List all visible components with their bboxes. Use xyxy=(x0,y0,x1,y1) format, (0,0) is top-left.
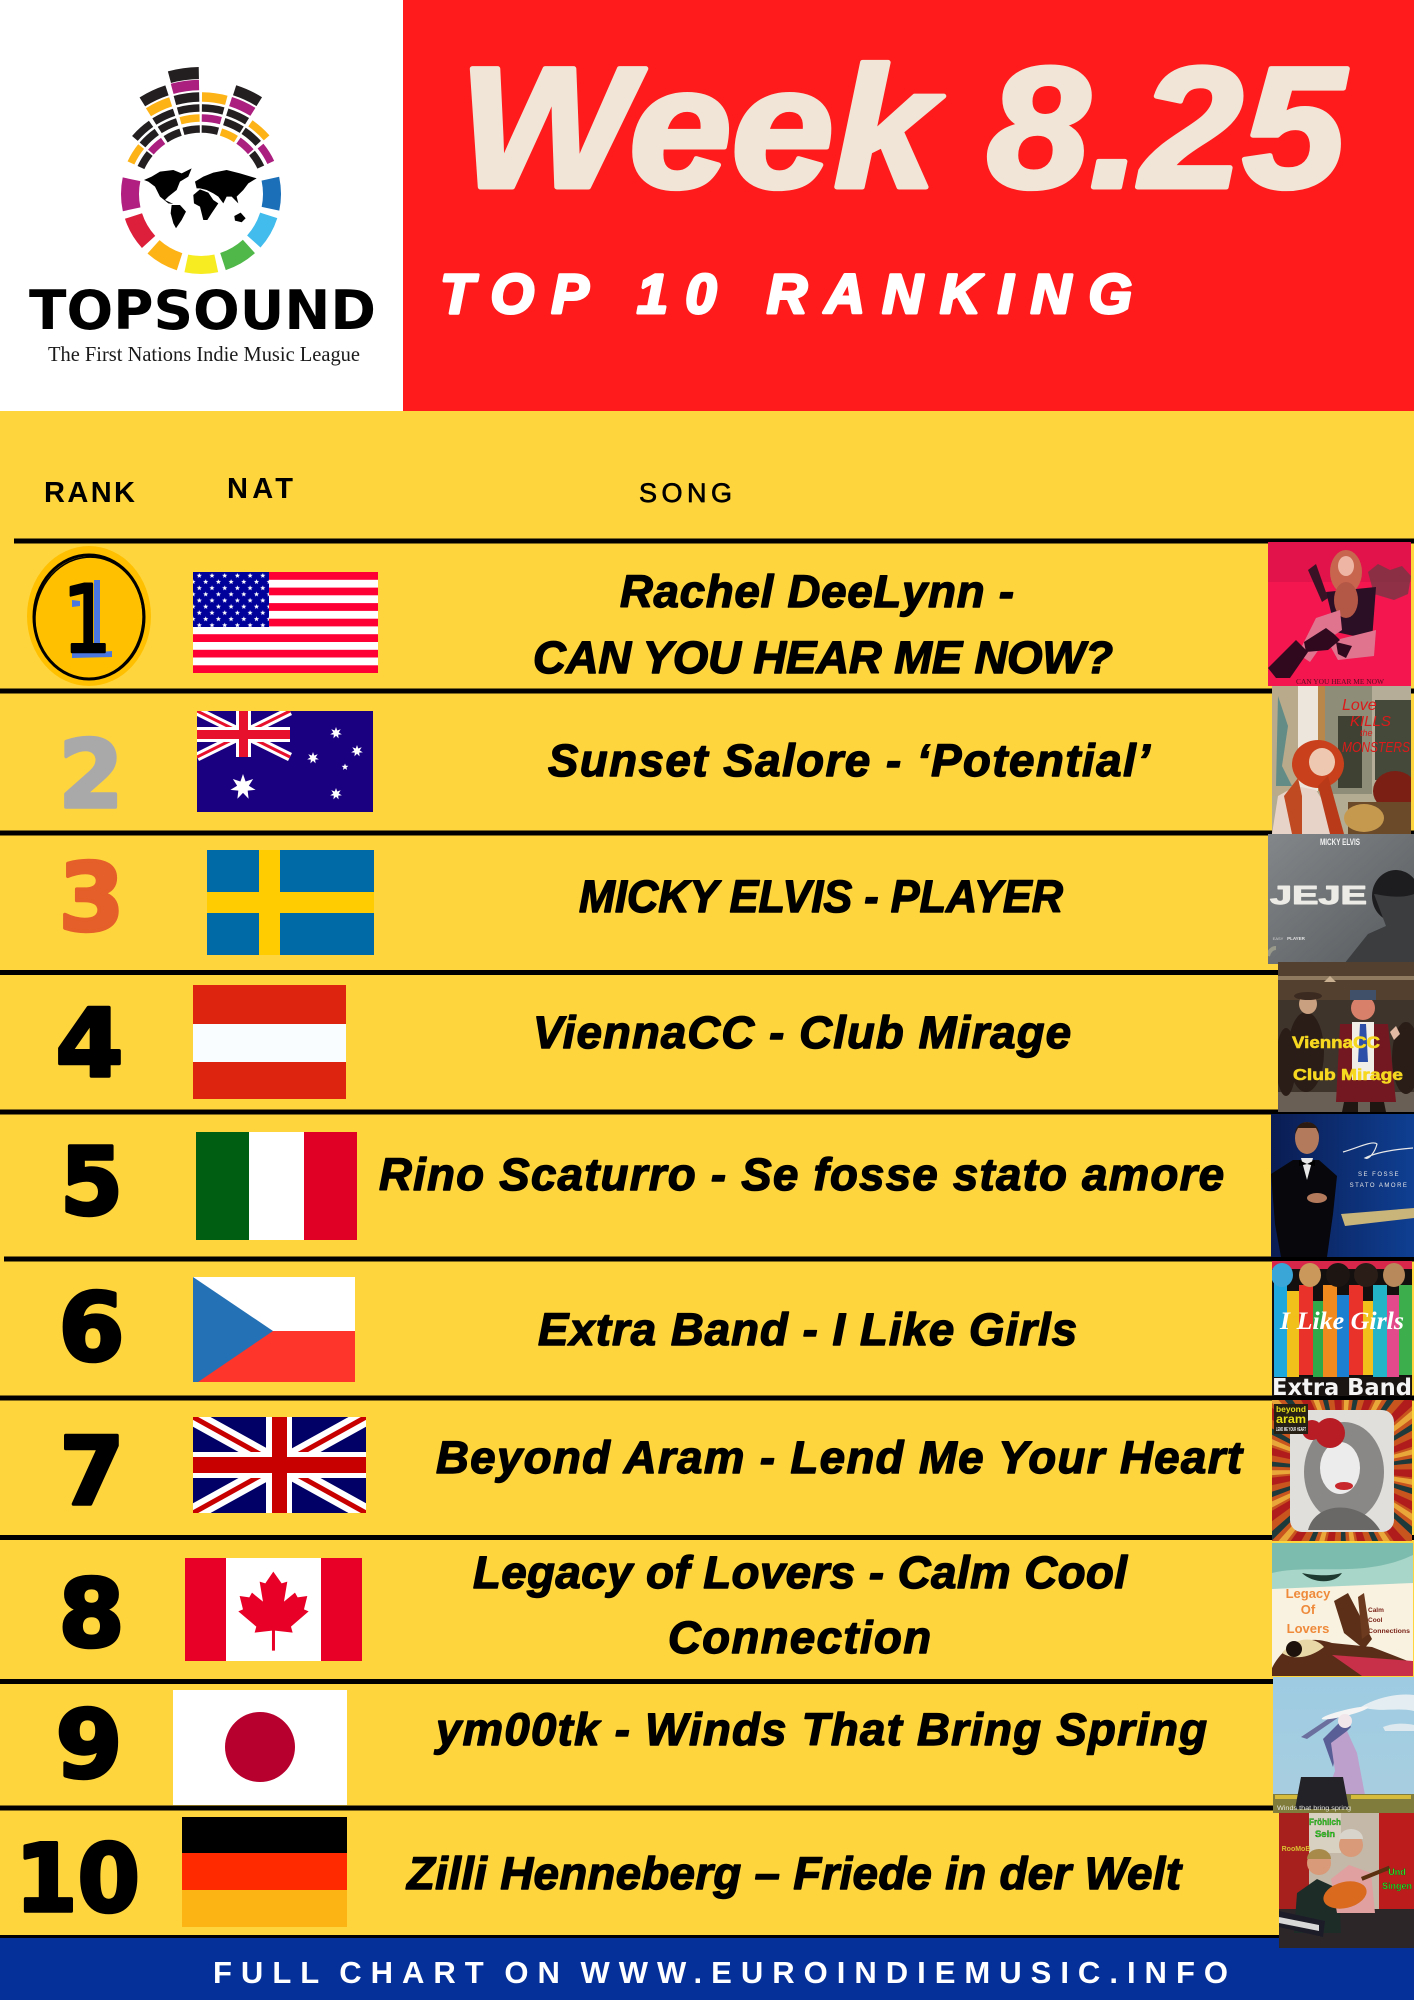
column: rank: RANK xyxy=(44,477,135,509)
logo tagline: The First Nations Indie Music League xyxy=(48,342,360,366)
rank 6: 6 xyxy=(58,1274,124,1383)
row 2 xyxy=(58,686,1414,834)
song title: Legacy of Lovers - Calm Cool xyxy=(473,1547,1128,1598)
cover art 6: Extra Band xyxy=(1272,1375,1412,1401)
row 10 xyxy=(15,1817,1183,1934)
song title: ViennaCC - Club Mirage xyxy=(533,1007,1071,1058)
cover art 5: STATO AMORE xyxy=(1350,1183,1408,1189)
cover art 3: JEJE xyxy=(1270,880,1367,910)
rank 5: 5 xyxy=(60,1128,123,1237)
cover art 6: I Like Girls xyxy=(1279,1308,1404,1335)
cover art 8: Of xyxy=(1301,1602,1316,1617)
song title: MICKY ELVIS - PLAYER xyxy=(579,871,1063,922)
song title: CAN YOU HEAR ME NOW? xyxy=(533,632,1113,683)
subtitle: TOP 10 RANKING xyxy=(440,262,1132,325)
equalizer arcs xyxy=(49,43,353,347)
cover art 8: Legacy xyxy=(1286,1586,1331,1601)
cover art 8: Calm xyxy=(1368,1607,1384,1614)
rank 2: 2 xyxy=(58,721,124,830)
row 5 xyxy=(60,1114,1414,1257)
cover art 8: Connections xyxy=(1368,1628,1410,1635)
logo wordmark: TOPSOUND xyxy=(29,279,376,342)
cover art 10: RooMoB xyxy=(1282,1846,1310,1853)
song title xyxy=(533,566,1113,683)
cover art 10: Sein xyxy=(1315,1829,1335,1840)
row 6 xyxy=(58,1261,1412,1401)
cover art 8: Lovers xyxy=(1287,1621,1329,1636)
cover art 5 xyxy=(1271,1114,1414,1257)
rank 3: 3 xyxy=(58,844,124,953)
logo emblem xyxy=(49,43,353,347)
song title: Connection xyxy=(668,1612,931,1663)
cover art 2 xyxy=(1272,686,1411,834)
song title: ym00tk - Winds That Bring Spring xyxy=(434,1704,1207,1755)
flag: Austria xyxy=(193,985,346,1099)
rank 10: 10 xyxy=(15,1825,140,1934)
cover art 1 xyxy=(1268,542,1411,686)
cover art 4: ViennaCC xyxy=(1292,1033,1380,1052)
flag: Italy xyxy=(196,1132,357,1240)
cover art 3: EASY xyxy=(1273,936,1284,941)
flag: Czech Republic xyxy=(193,1277,355,1382)
cover art 7: beyond xyxy=(1276,1405,1306,1414)
song title xyxy=(473,1547,1128,1663)
song title: Extra Band - I Like Girls xyxy=(538,1304,1077,1355)
rank 4: 4 xyxy=(56,990,124,1099)
cover art 4 xyxy=(1278,962,1414,1112)
flag: Australia xyxy=(197,711,373,812)
flag: Germany xyxy=(182,1817,347,1927)
cover art 10 xyxy=(1279,1813,1414,1948)
cover art 10: Fröhlich xyxy=(1309,1817,1341,1828)
cover art 9 xyxy=(1273,1677,1414,1813)
cover art 2: Love xyxy=(1342,697,1377,714)
cover art 2: KILLS xyxy=(1350,713,1391,730)
cover art 5: SE FOSSE xyxy=(1358,1172,1400,1178)
panel: logo xyxy=(0,0,403,411)
row dividers xyxy=(0,538,1414,1938)
cover art 7: aram xyxy=(1276,1412,1306,1426)
cover art 4: Club Mirage xyxy=(1293,1067,1403,1084)
cover art 3 xyxy=(1268,834,1414,964)
cover art 1: CAN YOU HEAR ME NOW xyxy=(1296,677,1385,686)
cover art 10: Singen xyxy=(1382,1881,1412,1891)
rank 8: 8 xyxy=(58,1560,124,1669)
title: Week 8.25 xyxy=(459,32,1347,224)
rank 1 badge xyxy=(27,546,151,686)
cover art 8 xyxy=(1272,1543,1413,1676)
panel: title banner xyxy=(403,0,1414,411)
cover art 3: PLAYER xyxy=(1287,936,1306,941)
footer band xyxy=(0,1938,1414,2000)
song title: Rachel DeeLynn - xyxy=(620,566,1014,617)
rank 1 badge: 1 xyxy=(62,566,112,675)
cover art 2: the xyxy=(1360,728,1373,738)
row 7 xyxy=(60,1348,1414,1592)
song title: Beyond Aram - Lend Me Your Heart xyxy=(436,1432,1244,1483)
row 3 xyxy=(58,834,1414,964)
cover art 8: Cool xyxy=(1368,1617,1383,1624)
flag: Canada xyxy=(185,1558,362,1661)
table header xyxy=(44,473,732,509)
flag: United Kingdom xyxy=(193,1417,366,1513)
flag: Japan xyxy=(173,1690,347,1805)
cover art 10: Und xyxy=(1388,1867,1406,1877)
column: nat: NAT xyxy=(227,473,293,505)
row 1 xyxy=(27,542,1411,686)
cover art 6 xyxy=(1272,1261,1412,1401)
column: song: SONG xyxy=(639,478,732,508)
rank 9: 9 xyxy=(56,1691,122,1800)
row 4 xyxy=(56,962,1414,1112)
row 8 xyxy=(58,1543,1413,1676)
cover art 7 xyxy=(1272,1400,1412,1541)
cover art 9: Winds that bring spring xyxy=(1277,1805,1351,1812)
rank 7: 7 xyxy=(60,1418,124,1527)
colour ring xyxy=(101,94,301,294)
song title: Sunset Salore - ‘Potential’ xyxy=(548,735,1151,786)
row 9 xyxy=(56,1677,1414,1813)
flag: Sweden xyxy=(207,850,374,955)
song title: Rino Scaturro - Se fosse stato amore xyxy=(379,1149,1224,1200)
cover art 3: MICKY ELVIS xyxy=(1320,837,1360,847)
cover art 7: LEND ME YOUR HEART xyxy=(1276,1427,1306,1433)
footer text: FULL CHART ON WWW.EUROINDIEMUSIC.INFO xyxy=(213,1955,1228,1990)
song title: Zilli Henneberg – Friede in der Welt xyxy=(405,1848,1183,1899)
world map xyxy=(144,168,257,228)
flag: USA xyxy=(193,572,378,673)
